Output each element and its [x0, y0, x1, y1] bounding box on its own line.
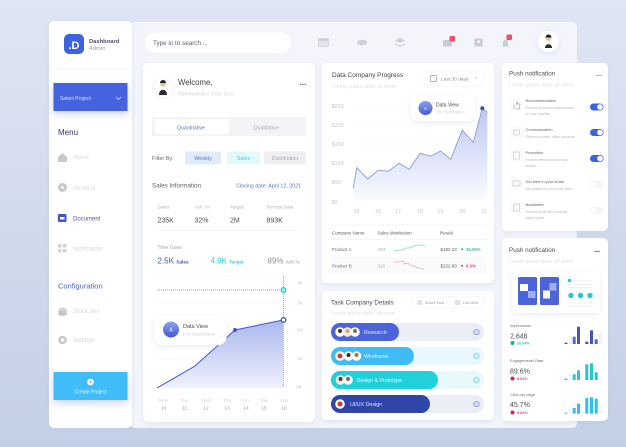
row: product B [332, 261, 476, 270]
callout: data view: Put Description [436, 110, 466, 114]
area chart: time gone: 12 [203, 406, 209, 412]
time gone stats: 2.5K Sales [158, 256, 189, 266]
area chart: time gone: 13 [224, 406, 230, 412]
area chart: time gone: 14 [243, 406, 249, 412]
bars: engagements rate [564, 363, 602, 380]
area chart: time gone: 16 [281, 406, 287, 412]
y axis labels [332, 104, 344, 206]
nav: application: Application [73, 246, 102, 252]
callout: data view: Data View [436, 102, 459, 108]
nav: home [58, 153, 90, 162]
nav: document: Document [73, 216, 101, 222]
icon: logo [64, 34, 84, 54]
view switch: Board View [425, 301, 445, 305]
setting: recommendation: Recommendation [526, 98, 556, 103]
day labels: Fri [243, 398, 249, 404]
select project button: Select Project [60, 96, 91, 102]
setting: email alert [510, 177, 604, 191]
y axis labels: $200 [332, 123, 344, 129]
view switch: List View [463, 301, 478, 305]
setting: promotion: activity [526, 164, 536, 168]
heading: Push notification [509, 247, 555, 254]
row: product B: 915 [378, 264, 386, 268]
heading: Lorem ipsum dolor sit amet [332, 84, 396, 90]
welcome text: Welcome, [178, 78, 213, 87]
x axis labels: 20 [460, 209, 465, 215]
x axis labels [354, 209, 487, 215]
task bar: wireframe: Wireframe [364, 354, 388, 360]
sales stats: Target [230, 204, 244, 210]
filters [152, 152, 306, 164]
metric: engagements rate: Engagements Rate [510, 358, 543, 363]
metric: engagements rate [510, 358, 602, 381]
heading: Lorem ipsum dolor sit amet [509, 259, 573, 265]
area chart: time gone: 15 [261, 406, 267, 412]
menu dots: ... [594, 247, 600, 254]
sales stats: 32% [194, 218, 209, 224]
setting: promotion [510, 149, 604, 168]
x axis labels: 17 [395, 209, 401, 215]
metric: click per page: 8.64% [517, 411, 528, 415]
callout: data view [411, 96, 475, 121]
task bar: design and prototype [331, 371, 484, 389]
area chart: time gone: 11 [182, 406, 187, 412]
metric: click per page: Click per page [510, 392, 535, 397]
nav: shortcut: Shortcut [73, 186, 96, 192]
setting: recommendation [510, 98, 604, 116]
area chart: progress [332, 96, 487, 215]
day labels: Sun [280, 398, 289, 404]
nav: stack dev: Stack dev [73, 309, 99, 315]
area chart: time gone: 10 [161, 406, 166, 412]
task bar: research: Research [364, 330, 387, 336]
view switch [411, 297, 484, 308]
row: product A: $192.23 [440, 247, 457, 252]
setting: newsletter [510, 201, 604, 220]
x axis labels: 21 [481, 209, 487, 215]
brand text: Admin [89, 46, 105, 52]
panel: push notification settings [502, 63, 608, 231]
task bar: wireframe [331, 347, 484, 365]
axis labels: 3K [297, 300, 304, 306]
setting: promotion: Promotion [526, 150, 543, 155]
callout: data view: Put Description [183, 332, 216, 338]
nav: application [58, 244, 102, 252]
top bar [145, 31, 559, 52]
day labels [159, 398, 289, 404]
panel: welcome and sales [143, 63, 315, 422]
icon: contact [474, 38, 482, 46]
menu dots: ... [300, 78, 306, 87]
filters: Sales [237, 156, 250, 162]
brand text: Dashboard [89, 39, 119, 45]
heading: Task Company Details [331, 300, 394, 306]
day labels: Tue [180, 398, 189, 404]
time gone stats: Time Gone [158, 245, 182, 251]
time gone stats: 89% Ach.% [268, 256, 300, 266]
filters: Weekly [194, 156, 212, 162]
row: product A [332, 245, 481, 252]
icon: disc [357, 40, 367, 45]
company table [331, 225, 487, 274]
main panel background [130, 22, 577, 428]
menu dots: ... [596, 71, 602, 78]
task bar: UI/UX design [331, 395, 484, 413]
company table: Result [440, 230, 454, 236]
row: product B: 6.0% [466, 264, 476, 268]
row: product B: Product B [332, 264, 352, 268]
illustration card [512, 272, 600, 313]
axis labels: 2K [297, 328, 304, 334]
day labels: Sat [260, 398, 268, 404]
setting: communication: Receive updates, offers and more [526, 135, 575, 139]
nav: stack dev [58, 308, 99, 316]
metric: click per page [510, 392, 602, 415]
sales information heading [152, 182, 301, 190]
icon: window [318, 38, 328, 46]
setting: recommendation: on your activities [526, 112, 550, 116]
panel: task company details [322, 291, 494, 420]
create project button [54, 372, 128, 400]
setting: communication [510, 126, 604, 139]
time gone stats: 4.9K Target [210, 256, 244, 266]
y axis labels: $250 [332, 104, 344, 110]
callout: data view [154, 316, 226, 345]
axis labels [296, 280, 304, 390]
task bar: research [331, 323, 484, 341]
x axis labels: 19 [438, 209, 443, 215]
setting: newsletter: sales update [526, 216, 544, 220]
heading: Data Company Progress [332, 72, 403, 79]
avatar [538, 31, 559, 52]
sales stats: Ach. % [194, 204, 210, 210]
icon: logo: .D [68, 40, 80, 52]
y axis labels: $150 [332, 142, 344, 148]
icon: layers [395, 38, 405, 47]
axis labels: 0K [296, 384, 303, 390]
sales information heading: Sales Information [152, 182, 201, 190]
heading: Lorem ipsum dolor sit amet [331, 311, 395, 317]
callout: data view: A [424, 106, 428, 112]
metric: impressions: 2,648 [510, 334, 528, 340]
tab selector: Quantitative [177, 126, 205, 132]
y axis labels: $100 [332, 161, 344, 167]
select project button [54, 83, 128, 111]
sales stats: 2M [230, 218, 240, 224]
setting: newsletter: Newsletter [526, 202, 544, 207]
x axis labels: 18 [417, 209, 423, 215]
y axis labels: $0 [332, 200, 338, 206]
sales information heading: Closing date: April 12, 2021 [236, 184, 301, 190]
heading: menu: Menu [58, 128, 78, 137]
day labels: Wed [201, 398, 211, 404]
setting: promotion: Receive offers based on your [526, 158, 569, 162]
panel: data company progress [322, 63, 494, 283]
panel: sidebar [49, 21, 132, 428]
tab selector: Qualitative [253, 126, 279, 132]
company table: Sales distribution [378, 230, 412, 236]
company table: Company Name [332, 230, 365, 236]
axis labels: 1K [297, 356, 304, 362]
row: product A: Product A [332, 247, 352, 252]
search box [145, 32, 291, 52]
icon: mail with badge [443, 36, 455, 46]
sales stats: Sales [158, 204, 170, 210]
sales stats [158, 204, 294, 224]
setting: email alert: Get updates in your email inbox [526, 187, 572, 191]
row: product A: 253 [378, 247, 386, 252]
setting: newsletter: Receive email with company [526, 210, 568, 214]
nav: shortcut [58, 183, 96, 192]
y axis labels: $50 [332, 180, 341, 186]
time gone stats [158, 245, 300, 266]
date dropdown: Last 30 days [441, 76, 469, 82]
row: product A: 35.09% [466, 247, 481, 252]
panel: push notification metrics [502, 238, 608, 421]
heading: Push notification [509, 70, 555, 78]
day labels: Mon [159, 398, 168, 404]
row: product B: $222.83 [440, 264, 457, 268]
sales stats: Forcast Sale [266, 204, 294, 210]
tab selector [152, 117, 306, 136]
heading: Lorem ipsum dolor sit amet [509, 82, 573, 88]
metric: engagements rate: 8.64% [517, 377, 528, 381]
create project button: Create Project [75, 390, 107, 396]
area chart: time gone [154, 276, 304, 412]
bars: click per page [564, 397, 602, 414]
welcome text: Administrator John Doe [178, 92, 233, 98]
avatar: administrator [152, 78, 174, 99]
sales stats: 235K [158, 218, 174, 224]
task bar: UI/UX design: UI/UX Design [350, 402, 382, 408]
setting: email alert: Get alert in your email [526, 179, 564, 184]
axis labels: 4K [297, 280, 304, 286]
day labels: Thu [223, 398, 231, 404]
icon: bell with badge [502, 34, 512, 46]
filters: Filter By: [152, 156, 174, 162]
metric: impressions [510, 323, 602, 346]
date dropdown [424, 71, 484, 86]
nav: settings: Settings [73, 338, 95, 344]
metric: impressions: 26.84% [517, 342, 531, 346]
setting: recommendation: Receive recommendations based [526, 106, 575, 110]
search box: Type in to search .. [153, 40, 206, 47]
metric: impressions: Impressions [510, 323, 531, 328]
bars: impressions [564, 327, 602, 344]
x axis labels: 15 [354, 209, 359, 215]
nav: document [58, 214, 101, 222]
setting: communication: Communication [526, 127, 553, 132]
nav: settings [60, 337, 95, 344]
callout: data view: Data View [183, 324, 208, 330]
sales stats: 893K [266, 218, 283, 224]
nav: home: Home [73, 155, 90, 161]
metric: click per page: 45.7% [510, 402, 530, 409]
metric: engagements rate: 89.6% [510, 368, 530, 376]
heading: configuration: Configuration [58, 282, 103, 290]
filters: Distribution [272, 156, 298, 162]
x axis labels: 16 [375, 209, 381, 215]
callout: data view: A [169, 328, 173, 334]
task bar: design and prototype: Design & Prototype [356, 378, 402, 384]
